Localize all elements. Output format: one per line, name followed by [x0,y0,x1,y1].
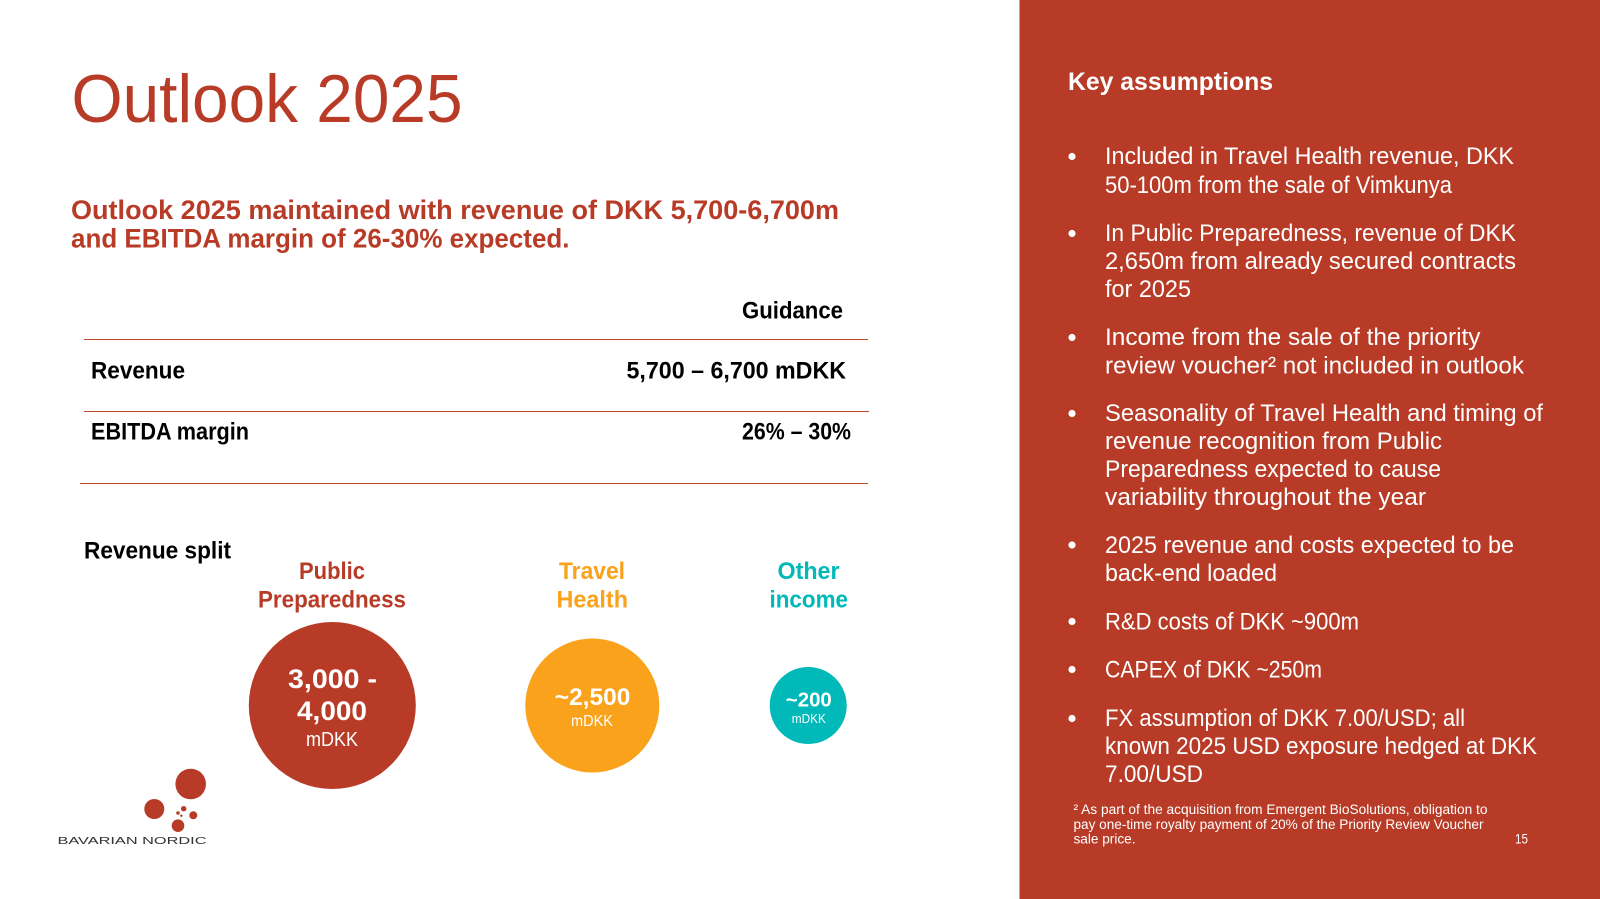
bullet list: variability throughout the year [1105,484,1426,511]
column header: guidance: Guidance [742,298,843,324]
label: other income: Other [778,558,840,585]
bullet list: 2,650m from already secured contracts [1105,248,1516,275]
bullet list: Seasonality of Travel Health and timing of [1105,400,1543,427]
guidance table [80,298,869,484]
label: public preparedness: Preparedness [258,586,406,614]
logo: Bavarian Nordic [58,769,206,847]
subheading [71,195,839,254]
bullet list: review voucher² not included in outlook [1105,352,1525,380]
circle: public preparedness: 3,000 - [288,664,377,694]
bullet list: revenue recognition from Public [1105,428,1442,455]
footnote [1074,802,1488,846]
bullet list: for 2025 [1105,276,1191,303]
circle: other income: ~200 [786,690,832,712]
bullet list: Preparedness expected to cause [1105,456,1441,483]
bullet list: known 2025 USD exposure hedged at DKK [1105,733,1537,760]
label: travel health: Health [556,586,628,614]
row: EBITDA margin: EBITDA margin [91,418,249,446]
bullet list: FX assumption of DKK 7.00/USD; all [1105,705,1465,732]
bullet list: 50-100m from the sale of Vimkunya [1105,172,1453,199]
heading: key assumptions: Key assumptions [1068,68,1273,96]
heading: revenue split: Revenue split [84,538,231,564]
row: revenue: 5,700 – 6,700 mDKK [626,358,847,384]
row: EBITDA margin: 26% – 30% [742,418,851,446]
label: travel health: Travel [559,558,625,585]
logo: Bavarian Nordic: BAVARIAN NORDIC [58,836,206,847]
title: Outlook 2025 [72,61,462,137]
subheading: and EBITDA margin of 26-30% expected. [71,224,570,254]
bullet list: CAPEX of DKK ~250m [1105,656,1322,684]
label: other income: income [770,586,848,614]
label: other income [770,558,848,614]
bullet list: 2025 revenue and costs expected to be [1105,532,1514,559]
bullet list: Income from the sale of the priority [1105,324,1480,351]
bullet list: Included in Travel Health revenue, DKK [1105,143,1514,170]
footnote: ² As part of the acquisition from Emergent BioSolutions, obligation to [1074,802,1488,817]
label: public preparedness: Public [299,558,365,585]
bullet list: R&D costs of DKK ~900m [1105,608,1359,636]
bullet list: 7.00/USD [1105,761,1203,788]
label: travel health [556,558,628,614]
bullet list: back-end loaded [1105,560,1277,587]
circle: travel health: ~2,500 [555,684,630,711]
row: revenue [91,358,847,384]
circle: public preparedness: 4,000 [297,696,367,726]
circle: travel health: mDKK [571,713,613,730]
bullet list: In Public Preparedness, revenue of DKK [1105,220,1516,247]
bullet list [1068,143,1543,788]
circle: other income [770,667,847,744]
circle: public preparedness: mDKK [306,729,359,751]
footnote: pay one-time royalty payment of 20% of the Priority Review Voucher [1074,817,1484,832]
circle: other income: mDKK [792,711,826,726]
subheading: Outlook 2025 maintained with revenue of DKK 5,700-6,700m [71,195,839,225]
row: revenue: Revenue [91,358,185,384]
circle: public preparedness [249,622,416,789]
footnote: sale price. [1074,832,1136,846]
circle: travel health [525,638,659,772]
label: public preparedness [258,558,406,614]
page number: 15 [1515,832,1528,846]
row: EBITDA margin [91,418,851,446]
panel: key assumptions [1020,0,1600,899]
